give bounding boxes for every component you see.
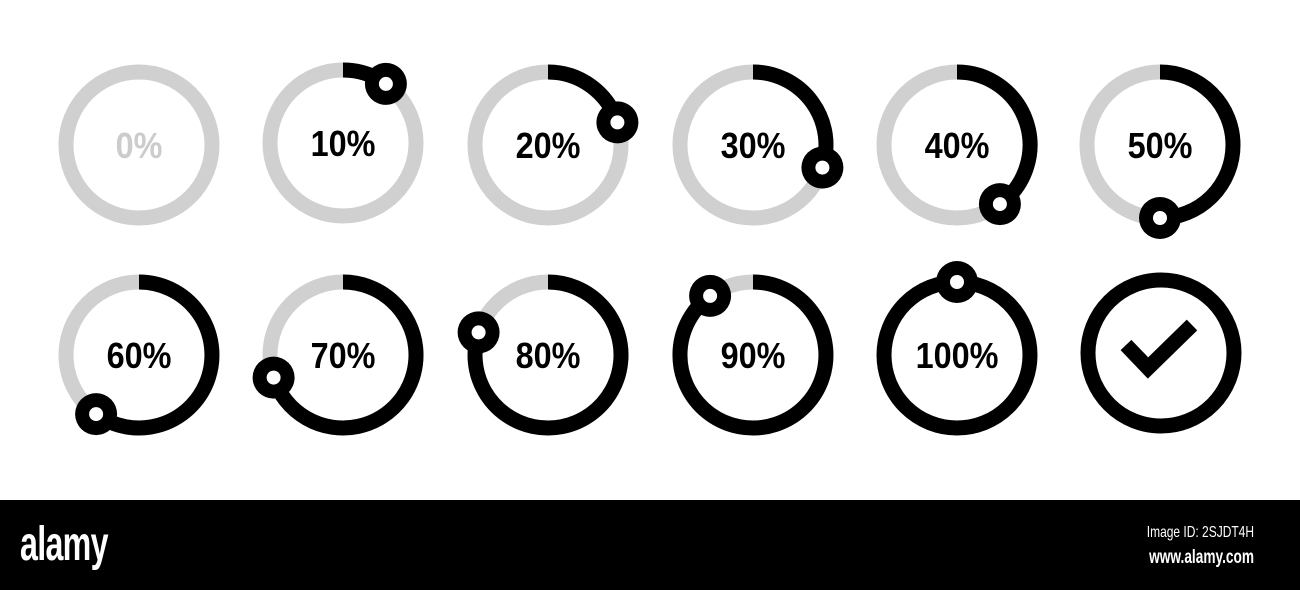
website: www.alamy.com: [1148, 546, 1254, 568]
icon: 20%: [475, 72, 638, 218]
icon: 30%: [680, 72, 843, 218]
icon: 50%: 50%: [1128, 126, 1192, 166]
icon: 60%: [66, 282, 212, 435]
logo: alamy: alamy: [20, 516, 109, 571]
icon: 80%: [458, 282, 621, 428]
icon: 100%: 100%: [916, 336, 998, 376]
icon: 50%: [1087, 72, 1233, 239]
icon: 90%: [680, 275, 826, 428]
icon: 40%: 40%: [925, 126, 989, 166]
image id: Image ID: 2SJDT4H: [1147, 522, 1254, 540]
footer bar: [0, 500, 1300, 590]
icon: 0%: 0%: [116, 126, 162, 166]
icon: 70%: 70%: [311, 336, 375, 376]
icon: 100%: [884, 261, 1030, 428]
icon: 80%: 80%: [516, 336, 580, 376]
icon: 40%: [884, 72, 1030, 225]
icon: 30%: 30%: [721, 126, 785, 166]
icon: 10%: [270, 63, 416, 216]
icon: 20%: 20%: [516, 126, 580, 166]
icon: 60%: 60%: [107, 336, 171, 376]
icon: 90%: 90%: [721, 336, 785, 376]
icon: 0%: [66, 72, 212, 218]
icon: 70%: [253, 282, 416, 428]
icon: checkmark complete: [1088, 280, 1234, 426]
icon: 10%: 10%: [311, 124, 375, 164]
